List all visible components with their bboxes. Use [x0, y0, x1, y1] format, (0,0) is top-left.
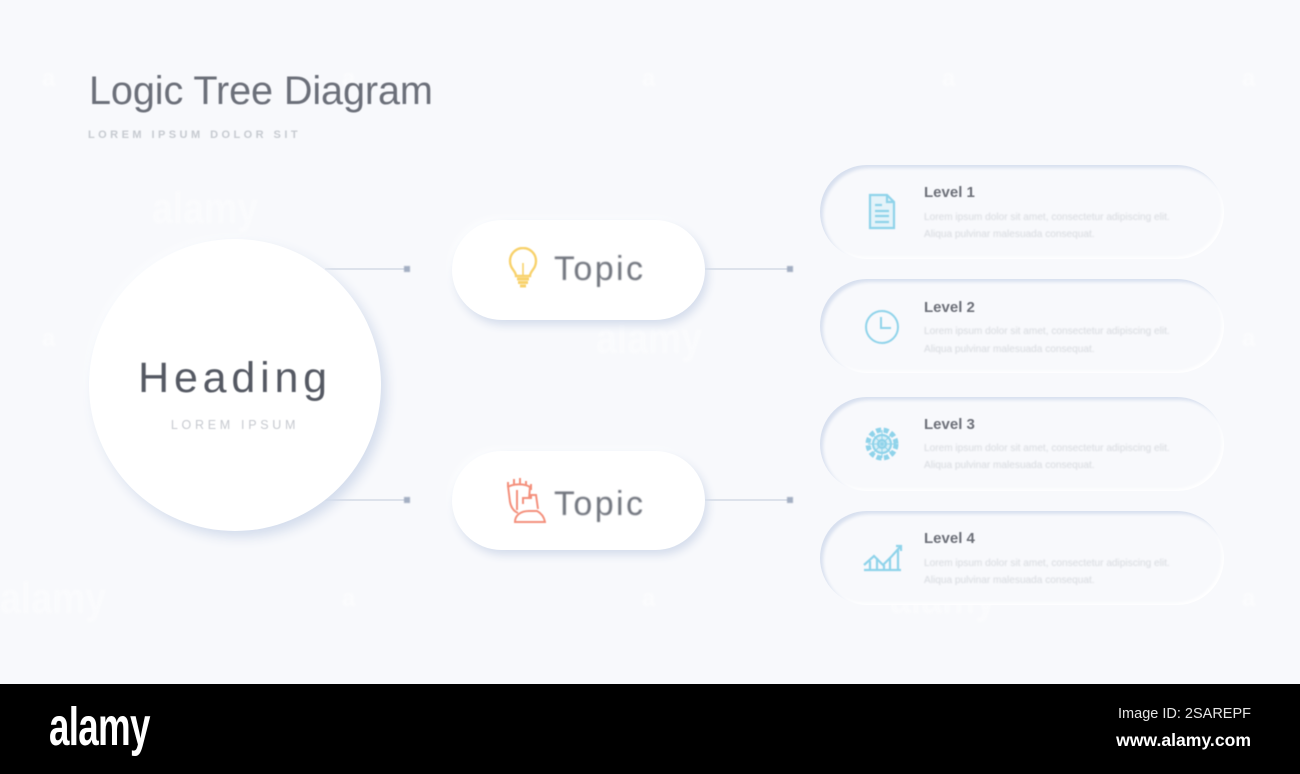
watermark: alamy repeats: alamy — [1042, 180, 1148, 229]
panel: level 3 — [820, 397, 1224, 491]
watermark: alamy repeats: a — [1242, 585, 1255, 612]
level text: Lorem ipsum dolor sit amet, consectetur adipiscing elit. — [924, 212, 1170, 223]
connector: bottom topic to levels — [706, 496, 794, 504]
watermark: alamy repeats: a — [42, 325, 55, 352]
topic label: Topic — [554, 250, 645, 288]
watermark: alamy repeats: a — [42, 65, 55, 92]
panel: level 2 — [820, 279, 1224, 373]
watermark: alamy repeats: alamy — [0, 574, 106, 623]
topic label: Topic — [554, 485, 645, 523]
title: Logic Tree Diagram — [89, 69, 433, 113]
level text line 2: Aliqua pulvinar malesuada consequat. — [924, 460, 1095, 471]
watermark: alamy repeats: alamy — [890, 574, 996, 623]
icon: chart — [863, 544, 903, 572]
panel: topic 1 — [452, 220, 705, 320]
panel: level 1 — [820, 165, 1224, 259]
watermark: alamy repeats: a — [642, 585, 655, 612]
level title: Level 4 — [924, 530, 975, 547]
level text line 2: Aliqua pulvinar malesuada consequat. — [924, 229, 1095, 240]
heading: Heading — [138, 354, 332, 402]
watermark: alamy repeats: alamy — [152, 184, 258, 233]
level text line 2: Aliqua pulvinar malesuada consequat. — [924, 575, 1095, 586]
connector: heading to bottom topic — [332, 496, 411, 504]
level title: Level 2 — [924, 299, 975, 316]
panel: topic 2 — [452, 451, 705, 550]
watermark: alamy repeats: a — [342, 585, 355, 612]
panel: level 4 — [820, 511, 1224, 605]
icon: hand — [506, 477, 547, 524]
website: www.alamy.com — [1116, 730, 1251, 750]
alamy logo: alamy — [49, 697, 150, 757]
level text: Lorem ipsum dolor sit amet, consectetur adipiscing elit. — [924, 326, 1170, 337]
connector: heading to top topic — [325, 265, 411, 273]
icon: document — [868, 193, 896, 230]
icon: clock — [864, 309, 900, 345]
icon: light bulb — [508, 246, 538, 288]
level title: Level 3 — [924, 416, 975, 433]
subtitle: LOREM IPSUM DOLOR SIT — [88, 129, 301, 141]
level text: Lorem ipsum dolor sit amet, consectetur adipiscing elit. — [924, 558, 1170, 569]
watermark: alamy repeats: a — [642, 65, 655, 92]
level text: Lorem ipsum dolor sit amet, consectetur adipiscing elit. — [924, 443, 1170, 454]
image id: Image ID: 2SAREPF — [1118, 706, 1251, 722]
level text line 2: Aliqua pulvinar malesuada consequat. — [924, 344, 1095, 355]
level title: Level 1 — [924, 184, 975, 201]
footer band — [0, 684, 1300, 774]
icon: gear — [865, 427, 899, 461]
heading caption: LOREM IPSUM — [171, 418, 299, 432]
watermark: alamy repeats: a — [1242, 325, 1255, 352]
watermark: alamy repeats: a — [342, 65, 355, 92]
watermark: alamy repeats: a — [1242, 65, 1255, 92]
watermark: alamy repeats: a — [942, 65, 955, 92]
panel: heading circle — [89, 239, 381, 531]
connector: top topic to levels — [706, 265, 794, 273]
watermark: alamy repeats: alamy — [596, 314, 702, 363]
